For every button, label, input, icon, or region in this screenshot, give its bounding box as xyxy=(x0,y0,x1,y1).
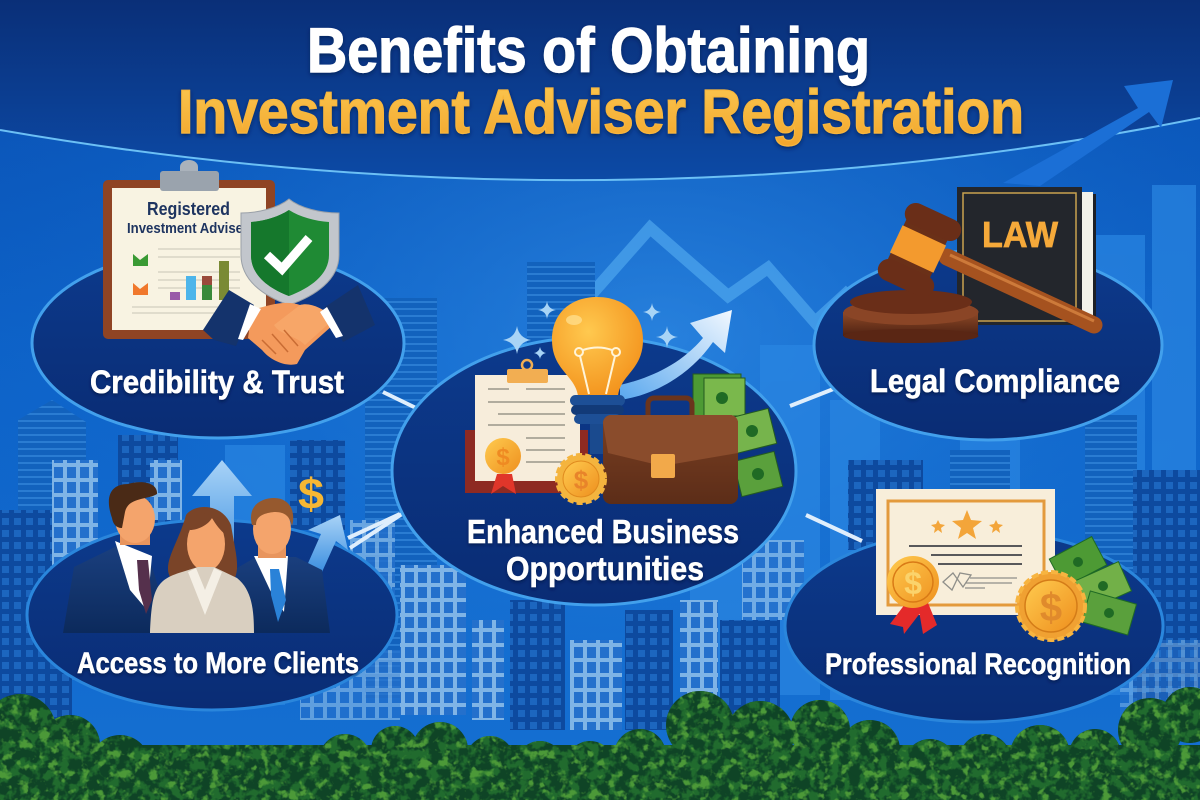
skyline far bars xyxy=(225,185,1196,705)
icon: clipboard: Registered xyxy=(147,199,230,219)
icon: ribbon seal: $ xyxy=(904,565,922,601)
icon: law book xyxy=(957,187,1096,325)
arc line under title xyxy=(0,118,1200,180)
icon: clipboard xyxy=(103,160,275,339)
icon: gavel xyxy=(843,199,1094,343)
panel: enhanced business opportunities xyxy=(392,297,796,605)
icon: woman center xyxy=(150,507,254,633)
title banner with curved edge xyxy=(0,0,1200,180)
trend chart line xyxy=(560,228,850,330)
panel: legal compliance xyxy=(814,187,1162,440)
panel: professional recognition xyxy=(785,489,1163,722)
icon: shield xyxy=(241,199,339,305)
icon: law book: LAW xyxy=(982,214,1058,255)
icon: banknotes xyxy=(693,374,783,497)
big growth arrow xyxy=(1003,80,1173,186)
label: professional recognition: Professional Recognition xyxy=(825,648,1131,681)
icon: ribbon seal xyxy=(887,556,939,634)
icon: dollar sign: $ xyxy=(298,470,324,519)
label: enhanced business: Enhanced Business xyxy=(467,513,739,550)
icon: light bulb xyxy=(552,297,643,454)
icon: document with seal: $ xyxy=(496,444,510,471)
label: opportunities: Opportunities xyxy=(506,550,704,587)
icon: banknotes xyxy=(1049,537,1136,635)
icon: gold badge xyxy=(1017,572,1085,640)
icon: man right xyxy=(233,498,330,633)
skyline buildings xyxy=(0,262,1200,730)
icon: diagonal arrow xyxy=(305,514,400,572)
label: legal compliance: Legal Compliance xyxy=(870,363,1120,399)
panel: access to more clients xyxy=(27,460,400,710)
foliage xyxy=(0,687,1200,800)
title xyxy=(178,16,1024,147)
icon: certificate xyxy=(876,489,1055,615)
icon: gold badge xyxy=(557,455,605,503)
connector lines xyxy=(350,388,862,548)
label: credibility and trust: Credibility & Trust xyxy=(90,364,344,400)
icon: gold badge: $ xyxy=(574,465,589,495)
icon: document with seal xyxy=(465,360,588,494)
panel: credibility and trust xyxy=(32,160,404,438)
icon: sparkles xyxy=(503,301,678,359)
label: access to more clients: Access to More Clients xyxy=(77,647,359,680)
icon: gold badge: $ xyxy=(1040,586,1062,630)
icon: up arrow xyxy=(192,460,252,570)
icon: handshake xyxy=(203,285,375,365)
title: Benefits of Obtaining xyxy=(307,16,870,86)
icon: growth arrow xyxy=(620,310,732,400)
icon: man left xyxy=(63,482,172,633)
title: Investment Adviser Registration xyxy=(178,78,1024,147)
icon: briefcase xyxy=(603,398,738,504)
icon: clipboard: Investment Advise xyxy=(127,220,243,237)
